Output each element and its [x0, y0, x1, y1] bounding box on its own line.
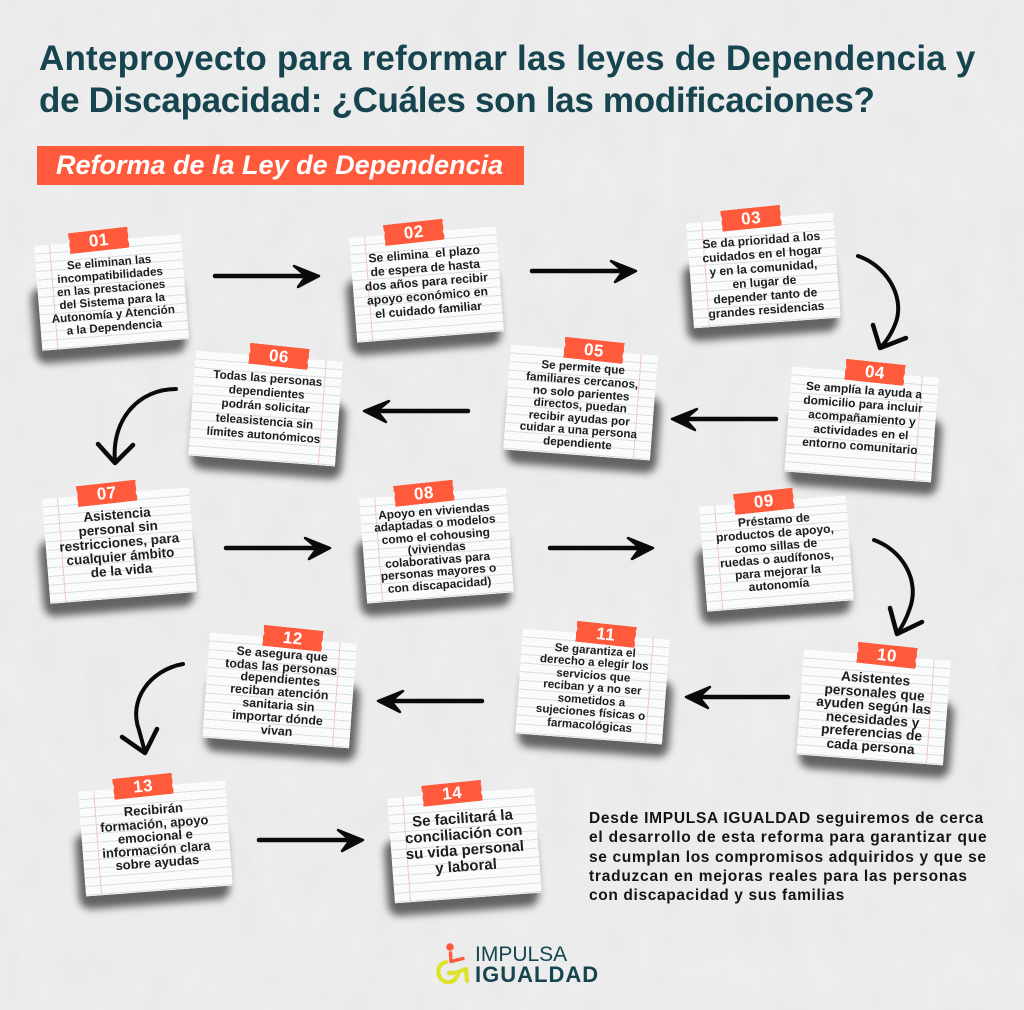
arrow 02 to 03 [532, 261, 636, 282]
note card 10: ayuden según las [815, 693, 931, 717]
note card 08: como el cohousing [381, 524, 490, 546]
closing statement: se cumplan los compromisos adquiridos y que se [589, 849, 987, 866]
note card 02 [349, 226, 503, 342]
note card 11 [515, 628, 669, 744]
note card 05: no solo parientes [532, 383, 629, 403]
note card 03: grandes residencias [707, 298, 824, 320]
note card 07: personal sin [77, 517, 158, 538]
note card 07: restricciones, para [58, 529, 179, 554]
note card 03: 03 [739, 207, 761, 228]
title: de Discapacidad: ¿Cuáles son las modificaciones? [39, 80, 875, 120]
note card 08: 08 [412, 482, 434, 503]
note card 03: depender tanto de [712, 284, 817, 306]
arrow 03 to 04 [858, 256, 906, 348]
note card 14: conciliación con [404, 821, 522, 846]
note card 10: Asistentes [840, 668, 910, 688]
note card 12 [202, 632, 356, 748]
note card 02: dos años para recibir [364, 269, 488, 293]
note card 10 [796, 649, 950, 765]
note card 06 [188, 350, 342, 466]
note card 10: preferencias de [820, 721, 922, 743]
logo: IMPULSA [475, 943, 567, 966]
note card 06: dependientes [228, 382, 305, 402]
note card 14: su vida personal [405, 837, 524, 862]
note card 12: 12 [281, 627, 303, 648]
arrow 13 to 14 [259, 830, 363, 851]
note card 08: colaborativas para [384, 549, 490, 571]
note card 09: para mejorar la [734, 561, 821, 581]
note card 10: 10 [875, 644, 897, 665]
closing statement: el desarrollo de esta reforma para garantizar que [589, 829, 987, 846]
note card 11: sometidos a [557, 691, 625, 709]
closing statement: con discapacidad y sus familias [589, 887, 845, 904]
note card 07: 07 [95, 482, 117, 503]
note card 12: sanitaria sin [241, 695, 315, 714]
note card 04: actividades en el [812, 420, 908, 442]
note card 08: personas mayores o [380, 560, 496, 583]
note card 01: del Sistema para la [58, 290, 165, 311]
note card 04 [784, 366, 938, 482]
note card 04: acompañamiento y [807, 406, 916, 428]
note card 11: sujeciones físicas o [535, 702, 645, 723]
note card 06: 06 [267, 345, 289, 366]
note card 10: personales que [824, 680, 925, 703]
note card 05: familiares cercanos, [525, 370, 638, 391]
note card 13: 13 [131, 775, 153, 796]
note card 09 [699, 495, 853, 611]
note card 04: domicilio para incluir [802, 392, 923, 415]
section banner: Reforma de la Ley de Dependencia [56, 150, 503, 180]
note card 01: en las prestaciones [56, 277, 165, 298]
note card 11: Se garantiza el [554, 640, 636, 659]
note card 04: entorno comunitario [801, 434, 918, 456]
note card 01: Se eliminan las [66, 252, 151, 271]
title [39, 39, 976, 120]
note card 12: reciban atención [229, 681, 328, 702]
note card 08: Apoyo en viviendas [377, 500, 490, 522]
note card 13: Recibirán [123, 800, 183, 819]
note card 10: cada persona [826, 735, 915, 756]
note card 02: 02 [402, 221, 424, 242]
note card 09: ruedas o audífonos, [719, 547, 834, 569]
arrow 06 to 07 [98, 389, 176, 463]
arrow 04 to 05 [672, 409, 776, 430]
note card 14 [387, 787, 541, 903]
note card 08: (viviendas [407, 538, 466, 557]
closing statement: Desde IMPULSA IGUALDAD seguiremos de cerca [589, 810, 984, 827]
note card 08: con discapacidad) [387, 573, 491, 595]
note card 02: el cuidado familiar [374, 298, 482, 320]
note card 14: y laboral [434, 855, 497, 876]
note card 02: de espera de hasta [369, 256, 480, 278]
note card 05: cuidar a una persona [519, 420, 637, 442]
note card 05: dependiente [542, 434, 612, 452]
note card 12: todas las personas [224, 655, 337, 677]
closing statement [589, 810, 987, 904]
note card 01: incompatibilidades [56, 264, 163, 285]
note card 05: recibir ayudas por [528, 408, 630, 429]
note card 12: Se asegura que [236, 643, 328, 664]
note card 14: Se facilitará la [411, 805, 513, 830]
note card 13: formación, apoyo [99, 811, 208, 834]
note card 10: necesidades y [825, 707, 919, 729]
note card 02: apoyo económico en [366, 283, 488, 307]
note card 07: Asistencia [82, 503, 151, 524]
note card 11: 11 [595, 623, 615, 644]
note card 06: podrán solicitar [221, 396, 310, 416]
note card 01 [34, 234, 188, 350]
note card 06: Todas las personas [212, 366, 322, 389]
arrow 05 to 06 [364, 401, 468, 422]
arrow 12 to 13 [122, 664, 183, 753]
note card 01: a la Dependencia [66, 316, 162, 337]
note card 06: teleasistencia sin [215, 409, 313, 431]
note card 09: autonomía [748, 575, 809, 593]
note card 13: emocional e [117, 826, 193, 846]
note card 11: derecho a elegir los [539, 652, 649, 673]
note card 01: Autonomía y Atención [51, 302, 175, 325]
note card 03: en lugar de [731, 272, 796, 290]
note card 09: Préstamo de [737, 509, 810, 529]
logo: IGUALDAD [475, 962, 599, 987]
note card 07: de la vida [90, 559, 152, 579]
note card 14: 14 [440, 782, 462, 803]
note card 04: Se amplía la ayuda a [805, 378, 922, 400]
note card 05: directos, puedan [533, 396, 627, 416]
arrow 11 to 12 [378, 691, 482, 712]
closing statement: traduzcan en mejoras reales para las personas [589, 868, 968, 885]
note card 13: sobre ayudas [114, 852, 199, 873]
note card 13 [78, 780, 232, 896]
arrow 07 to 08 [226, 538, 330, 559]
note card 05: 05 [582, 340, 604, 361]
arrow 10 to 11 [686, 687, 788, 708]
note card 07: cualquier ámbito [65, 544, 174, 567]
note card 12: importar dónde [231, 707, 323, 727]
note card 11: farmacológicas [546, 715, 632, 734]
note card 08 [359, 487, 513, 603]
note card 13: información clara [101, 838, 210, 861]
note card 05 [503, 345, 657, 460]
note card 11: reciban y a no ser [542, 677, 642, 697]
note card 03: y en la comunidad, [708, 256, 817, 278]
logo [436, 943, 599, 987]
note card 09: productos de apoyo, [715, 520, 834, 544]
note card 12: dependientes [239, 669, 320, 689]
note card 09: como sillas de [734, 535, 817, 555]
note card 02: Se elimina el plazo [367, 242, 480, 264]
icon: wheelchair user [436, 943, 470, 984]
title: Anteproyecto para reformar las leyes de Dependencia y [39, 39, 976, 78]
note card 03 [686, 212, 840, 328]
arrow 08 to 09 [550, 538, 653, 559]
arrow 09 to 10 [874, 540, 922, 634]
note card 11: servicios que [555, 666, 630, 684]
note card 05: Se permite que [540, 358, 625, 378]
note card 03: cuidados en el hogar [701, 242, 822, 264]
note card 12: vivan [260, 722, 292, 738]
note card 08: adaptadas o modelos [373, 511, 495, 535]
note card 03: Se da prioridad a los [701, 228, 820, 250]
note card 07 [42, 487, 196, 603]
note card 06: límites autonómicos [206, 423, 320, 445]
arrow 01 to 02 [215, 266, 319, 287]
note card 04: 04 [863, 361, 885, 382]
note card 01: 01 [87, 229, 109, 250]
note card 09: 09 [752, 490, 774, 511]
